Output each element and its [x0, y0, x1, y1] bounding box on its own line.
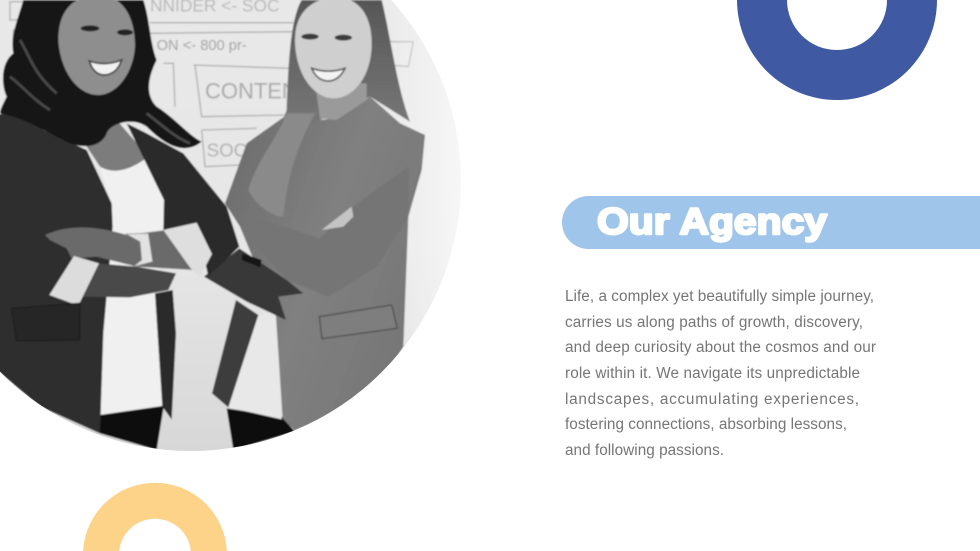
left woman: lower forearm — [82, 263, 176, 297]
body paragraph: and deep curiosity about the cosmos and our — [565, 339, 876, 356]
body paragraph: role within it. We navigate its unpredictable — [565, 365, 860, 382]
left woman: white top — [100, 155, 164, 415]
blue ring decoration — [737, 0, 937, 100]
left woman: jacket right panel and sleeve — [127, 123, 239, 277]
whiteboard sketches: ON <- 800 pr- — [157, 38, 247, 54]
whiteboard sketches: CONTENT — [205, 78, 311, 103]
bright right side of board — [393, 40, 461, 344]
right woman: grey blazer — [225, 97, 425, 431]
left woman: hair highlights — [10, 40, 190, 143]
left woman: curly hair — [0, 0, 202, 148]
right woman: pocket — [319, 305, 397, 339]
body paragraph: landscapes, accumulating experiences, — [565, 391, 859, 408]
whiteboard background — [0, 0, 449, 451]
body paragraph: carries us along paths of growth, discovery, — [565, 314, 863, 331]
body paragraph: Life, a complex yet beautifully simple journey, — [565, 288, 874, 305]
left woman: wristwatch — [126, 233, 153, 267]
photo: two smiling women in circular crop — [0, 0, 493, 467]
body paragraph — [565, 288, 876, 459]
right woman: dark sleeve elbow — [204, 248, 303, 320]
left woman: lower cuff — [49, 256, 99, 306]
left woman: face — [58, 0, 135, 95]
title banner — [562, 196, 980, 249]
left woman: black trousers — [98, 405, 164, 450]
right woman: neck — [315, 83, 367, 120]
left woman: upper cuff — [163, 223, 212, 277]
right woman: hand on sleeve — [322, 207, 353, 230]
body paragraph: and following passions. — [565, 442, 724, 459]
right woman: folded arm shading — [286, 193, 374, 295]
heading: Our Agency: Our Agency — [597, 201, 827, 242]
body paragraph: fostering connections, absorbing lessons, — [565, 416, 847, 433]
right woman: face — [295, 0, 372, 98]
right woman: long hair — [284, 0, 410, 126]
left woman: skin chest and neck — [86, 122, 146, 172]
right woman: white blouse — [228, 332, 283, 421]
banner shape — [562, 196, 980, 249]
left woman: jacket left panel and sleeve — [0, 110, 113, 433]
right woman: eyes and smile — [301, 34, 352, 81]
yellow ring decoration — [83, 483, 227, 551]
whiteboard sketches — [10, 0, 413, 167]
left woman: eyes and smile — [81, 25, 133, 75]
left woman: jacket lower right panel — [155, 290, 176, 419]
right woman: sleeve buttons — [242, 253, 262, 267]
left woman: upper forearm and hand — [45, 227, 195, 270]
right woman: hair over blazer — [248, 113, 315, 217]
right woman: black trousers — [227, 408, 295, 450]
left woman: pocket — [12, 303, 80, 341]
whiteboard sketches: SOCI — [207, 140, 252, 161]
right woman: dark inner jacket panel — [212, 300, 258, 407]
